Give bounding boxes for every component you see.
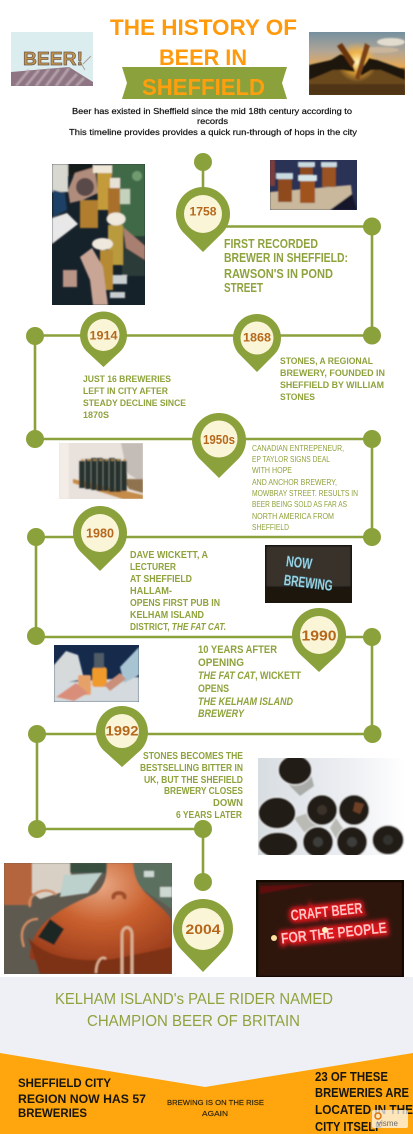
text: first recorded brewer: RAWSON'S IN POND (224, 267, 333, 281)
text: Dave Wickett: KELHAM ISLAND (130, 609, 204, 621)
intro text (69, 106, 358, 137)
photo: clinking glasses (54, 645, 139, 702)
text: 23 breweries in the city: CITY ITSELF (315, 1120, 382, 1134)
text: just 16 breweries (83, 374, 186, 421)
intro text: This timeline provides provides a quick run-through of hops in the city (69, 127, 358, 137)
text: 23 breweries in the city: 23 OF THESE (315, 1070, 388, 1084)
text: Kelham Island Brewery opens: OPENS (198, 683, 229, 695)
pin: 2004: 2004 (186, 921, 221, 937)
text: just 16 breweries: LEFT IN CITY AFTER (83, 386, 168, 397)
text: Dave Wickett: HALLAM- (130, 585, 172, 597)
text: EP Taylor deal: AND ANCHOR BREWERY, (252, 478, 337, 487)
photo: beer sign on roof: BEER! (23, 49, 83, 69)
text: Dave Wickett: DISTRICT, THE FAT CAT. (130, 621, 226, 633)
text: Kelham Island Brewery opens: OPENING (198, 657, 244, 669)
banner: Sheffield: SHEFFIELD (142, 74, 265, 100)
text: Stones closes (140, 750, 243, 821)
text: first recorded brewer: BREWER IN SHEFFIELD: (224, 251, 348, 265)
text: Kelham Island Brewery opens: BREWERY (198, 708, 245, 720)
photo: bottles at sunset (309, 32, 405, 95)
text: brewing on the rise: AGAIN (202, 1109, 228, 1118)
photo: flight of beers on tray (270, 160, 357, 210)
photo: beer sign on roof (11, 32, 93, 86)
heading: the history of beer in (110, 15, 297, 70)
text: Stones founded: STONES (280, 392, 315, 403)
pin: 1868 (233, 314, 281, 372)
text: Pale Rider champion beer: KELHAM ISLAND's PALE RIDER NAMED (55, 991, 333, 1008)
text: Pale Rider champion beer (55, 991, 333, 1030)
intro text: Beer has existed in Sheffield since the mid 18th century according to (72, 106, 352, 116)
text: Sheffield city region 57 breweries (18, 1076, 146, 1120)
text: Stones closes: STONES BECOMES THE (143, 750, 243, 762)
pin: 1990 (292, 608, 346, 672)
heading: the history of beer in: BEER IN (159, 45, 247, 70)
text: Stones closes: DOWN (213, 797, 243, 809)
text: Stones founded (280, 356, 385, 403)
watermark: visme (372, 1110, 408, 1128)
text: EP Taylor deal: BEER BEING SOLD AS FAR AS (252, 500, 347, 509)
text: EP Taylor deal (252, 444, 358, 532)
banner: Sheffield (122, 67, 287, 100)
text: EP Taylor deal: EP TAYLOR SIGNS DEAL (252, 455, 330, 464)
pin: 1758 (176, 187, 230, 252)
photo: raised beer glasses (52, 164, 145, 305)
text: EP Taylor deal: WITH HOPE (252, 466, 292, 475)
text: brewing on the rise (167, 1098, 264, 1118)
text: Sheffield city region 57 breweries: REGION NOW HAS 57 (18, 1092, 146, 1106)
pin: 1980 (73, 506, 127, 571)
pin: 1992 (96, 706, 148, 767)
text: Dave Wickett (130, 549, 226, 633)
text: Stones founded: STONES, A REGIONAL (280, 356, 373, 367)
text: Stones founded: SHEFFIELD BY WILLIAM (280, 380, 384, 391)
text: Sheffield city region 57 breweries: BREWERIES (18, 1106, 87, 1120)
text: Kelham Island Brewery opens: 10 YEARS AFTER (198, 644, 277, 656)
text: Stones closes: BREWERY CLOSES (164, 785, 243, 797)
text: Kelham Island Brewery opens: THE KELHAM ISLAND (198, 696, 293, 708)
text: Stones closes: 6 YEARS LATER (176, 809, 242, 821)
photo: craft beer neon sign: CRAFT BEER (290, 900, 363, 924)
text: EP Taylor deal: SHEFFIELD (252, 523, 289, 532)
text: just 16 breweries: JUST 16 BREWERIES (83, 374, 171, 385)
pin: 1758: 1758 (190, 204, 217, 218)
watermark: visme: visme (377, 1119, 398, 1128)
pin: 1950s (192, 413, 246, 478)
photo: now brewing neon sign (265, 545, 352, 603)
pin: 1980: 1980 (86, 526, 114, 540)
text: EP Taylor deal: MOWBRAY STREET. RESULTS IN (252, 489, 358, 498)
text: first recorded brewer: FIRST RECORDED (224, 237, 318, 251)
pin: 1914: 1914 (90, 328, 118, 342)
text: just 16 breweries: STEADY DECLINE SINCE (83, 398, 186, 409)
text: EP Taylor deal: CANADIAN ENTREPENEUR, (252, 444, 344, 453)
text: Stones closes: UK, BUT THE SHEFIELD (144, 774, 243, 786)
panel: orange chevron footer (0, 1053, 413, 1134)
pin: 1914 (80, 311, 127, 367)
text: Dave Wickett: LECTURER (130, 561, 176, 573)
pin: 1990: 1990 (302, 628, 336, 644)
photo: now brewing neon sign: NOW (285, 553, 314, 573)
text: brewing on the rise: BREWING IS ON THE RISE (167, 1098, 264, 1107)
photo: bottle tops (258, 758, 404, 855)
text: just 16 breweries: 1870S (83, 410, 109, 421)
timeline path (26, 153, 382, 891)
text: Dave Wickett: DAVE WICKETT, A (130, 549, 208, 561)
text: EP Taylor deal: NORTH AMERICA FROM (252, 512, 334, 521)
text: Kelham Island Brewery opens: THE FAT CAT, WICKETT (198, 670, 301, 682)
photo: copper brewing kettle (4, 863, 172, 974)
photo: dark bottles on shelf (59, 443, 143, 499)
text: Sheffield city region 57 breweries: SHEFFIELD CITY (18, 1076, 111, 1090)
text: first recorded brewer: STREET (224, 281, 263, 295)
pin: 1992: 1992 (106, 722, 139, 738)
photo: craft beer neon sign (256, 880, 404, 977)
pin: 1868: 1868 (243, 330, 271, 344)
text: Kelham Island Brewery opens (198, 644, 301, 720)
photo: craft beer neon sign: CRAFT BEER (290, 900, 363, 924)
pin: 2004 (173, 899, 233, 972)
heading: the history of beer in: THE HISTORY OF (110, 15, 297, 40)
text: Dave Wickett: OPENS FIRST PUB IN (130, 597, 220, 609)
text: Stones founded: BREWERY, FOUNDED IN (280, 368, 385, 379)
intro text: records (197, 116, 228, 126)
text: 23 breweries in the city (315, 1070, 413, 1134)
pin: 1950s: 1950s (203, 432, 235, 447)
text: first recorded brewer (224, 237, 348, 295)
text: Pale Rider champion beer: CHAMPION BEER OF BRITAIN (87, 1013, 300, 1030)
panel: grey footer background (0, 977, 413, 1134)
text: Dave Wickett: AT SHEFFIELD (130, 573, 192, 585)
text: Stones closes: BESTSELLING BITTER IN (140, 762, 243, 774)
